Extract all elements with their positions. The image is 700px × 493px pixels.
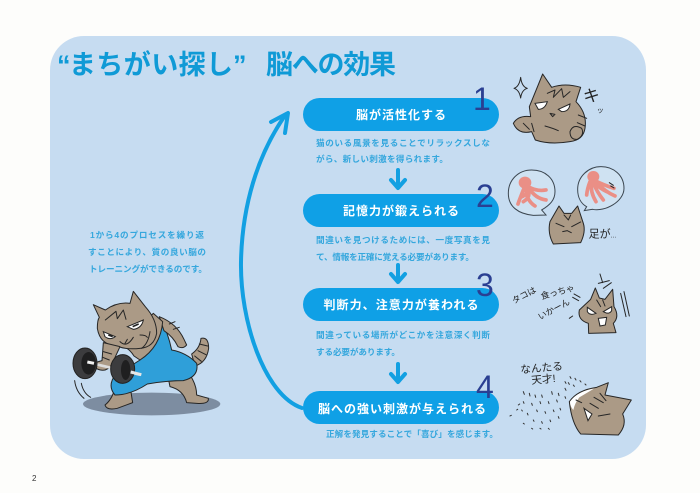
pill: step 3 heading — [303, 288, 499, 321]
handwritten note: 足が: 足が... — [589, 226, 616, 240]
number 4: 4 — [476, 369, 494, 405]
illustration: amazed cat with sparkle — [510, 361, 631, 435]
handwritten note: なんたる天才: なんたる — [520, 361, 563, 376]
title: 脳への効果 — [266, 50, 396, 80]
illustration: angry cat — [510, 274, 629, 333]
illustration: confident cat: キ — [582, 85, 601, 107]
number 2: 2 — [476, 178, 494, 214]
step 2 — [303, 178, 499, 262]
text: step 2 body: 間違いを見つけるためには、一度写真を見 — [316, 234, 490, 245]
intro text block: すことにより、質の良い脳の — [88, 246, 206, 257]
handwritten note: タコは食っちゃいかーん — [510, 283, 576, 322]
intro text block: 1から4のプロセスを繰り返 — [90, 229, 204, 240]
title — [57, 49, 396, 80]
text: step 1 body — [316, 137, 490, 164]
handwritten note: タコは食っちゃいかーん: タコは — [510, 285, 538, 306]
intro text block — [88, 229, 207, 274]
number 1: 1 — [473, 81, 491, 117]
illustration: cat lifting dumbbells — [73, 291, 220, 415]
pill: step 1 heading: 脳が活性化する — [356, 107, 446, 122]
cat head — [549, 206, 584, 244]
handwritten note: なんたる天才: 天才! — [531, 372, 556, 387]
illustration: confident cat — [513, 74, 604, 143]
handwritten note: タコは食っちゃいかーん: いかーん — [536, 297, 572, 322]
text: step 3 body: 間違っている場所がどこかを注意深く判断 — [316, 329, 490, 340]
handwritten note: なんたる天才 — [520, 361, 563, 387]
title: ” — [233, 50, 246, 80]
arrow: step 2 to 3 — [391, 265, 405, 282]
text: step 3 body: する必要があります。 — [316, 346, 400, 357]
illustration: octopus thought bubbles and cat — [508, 167, 624, 244]
illustration: confident cat: ッ — [597, 106, 604, 115]
text: step 1 body: 猫のいる風景を見ることでリラックスしな — [316, 137, 490, 148]
page number: 2 — [32, 474, 37, 483]
step 3 — [303, 267, 499, 357]
pill: step 2 heading — [303, 194, 499, 227]
text: step 1 body: がら、新しい刺激を得られます。 — [316, 153, 448, 164]
speech bubble: octopus left — [508, 170, 555, 215]
pill: step 3 heading: 判断力、注意力が養われる — [324, 297, 478, 312]
text: step 2 body — [316, 234, 490, 262]
handwritten note: タコは食っちゃいかーん: 食っちゃ — [540, 283, 576, 301]
arrow: large curved cycle arrow — [241, 113, 302, 408]
pill: step 1 heading — [303, 98, 499, 131]
text: step 4 body: 正解を発見することで「喜び」を感じます。 — [326, 428, 498, 439]
text: step 3 body — [316, 329, 490, 357]
speech bubble: octopus right — [578, 167, 624, 211]
arrow: step 1 to 2 — [391, 170, 405, 188]
intro text block: トレーニングができるのです。 — [89, 263, 207, 274]
step 4 — [303, 369, 499, 439]
panel: background — [50, 36, 646, 459]
text: step 2 body: て、情報を正確に覚える必要があります。 — [316, 251, 474, 262]
arrow: step 3 to 4 — [391, 364, 405, 382]
title: “ — [57, 50, 70, 80]
pill: step 4 heading — [303, 391, 499, 424]
number 3: 3 — [476, 267, 494, 303]
title: まちがい探し — [69, 49, 233, 80]
step 1 — [303, 81, 499, 164]
pill: step 4 heading: 脳への強い刺激が与えられる — [318, 401, 486, 416]
pill: step 2 heading: 記憶力が鍛えられる — [343, 203, 459, 218]
